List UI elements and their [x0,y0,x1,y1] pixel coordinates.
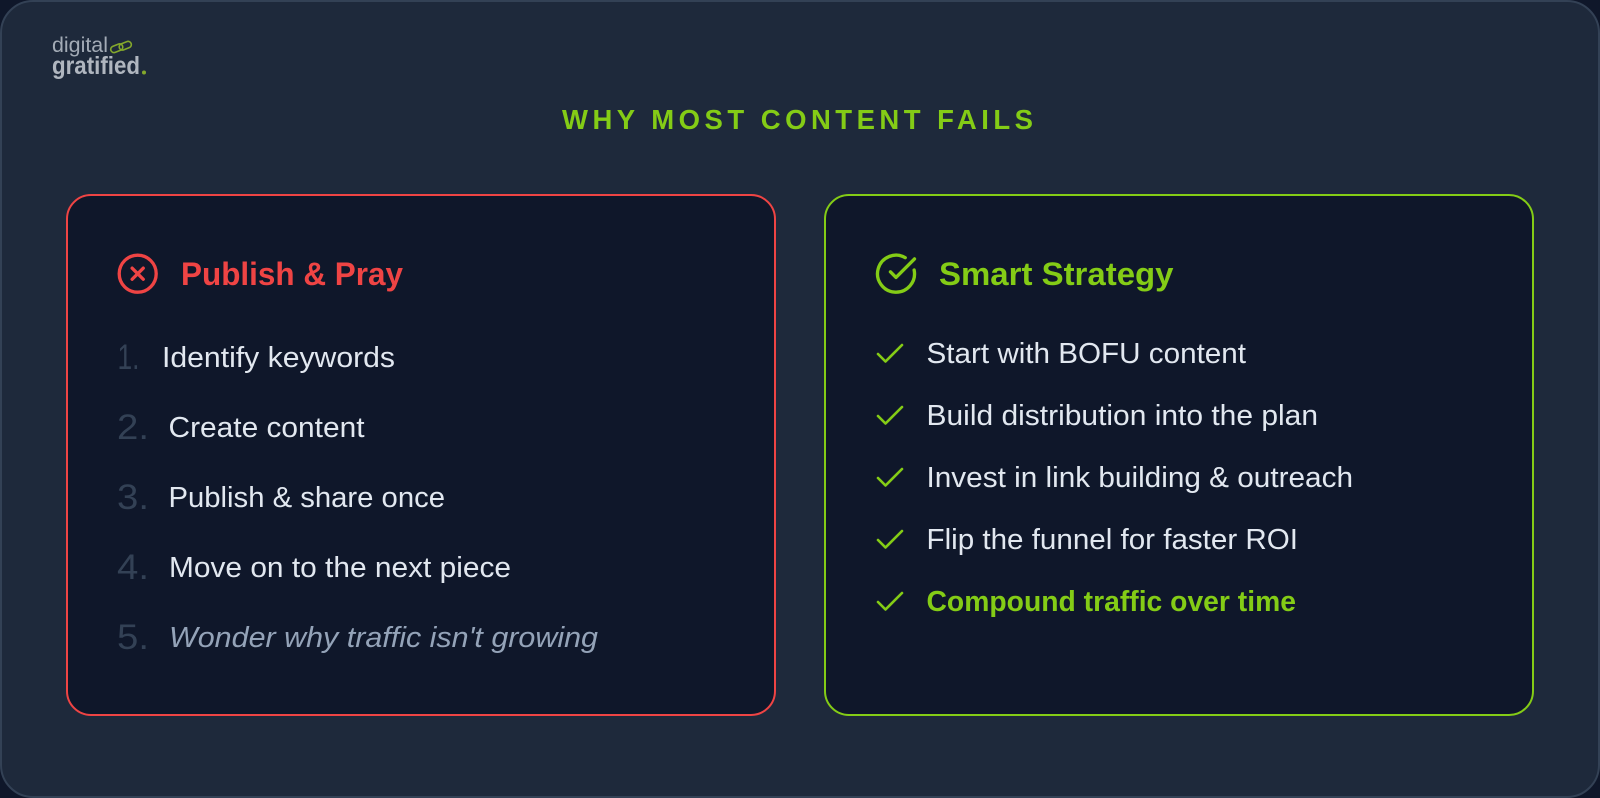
heading: publish and pray: Publish & Pray [181,256,403,292]
logo: digital gratified: gratified [52,52,140,80]
icon: check in circle [878,255,915,292]
list item 4: Move on to the next piece [169,552,511,584]
list item: start with bofu: Start with BOFU content [926,338,1246,370]
logo: digital gratified [52,33,146,80]
list item 5: Wonder why traffic isn't growing [169,622,598,654]
list item 1: Identify keywords [162,342,395,374]
list item 1: 1. [118,338,140,377]
panel: publish and pray [67,195,775,715]
list item: flip the funnel: Flip the funnel for faster ROI [926,524,1298,556]
list item 3 [117,478,445,517]
list item 2 [117,408,364,447]
list item 4: 4. [117,548,149,587]
list item: compound traffic: Compound traffic over time [926,586,1296,618]
list item 3: Publish & share once [168,482,445,514]
list item 2: 2. [117,408,149,447]
list item 5: 5. [117,618,149,657]
list item 2: Create content [168,412,364,444]
heading: smart strategy: Smart Strategy [939,256,1174,292]
list item 5 [117,618,598,657]
icon: chain link [110,40,132,54]
panel: smart strategy [825,195,1533,715]
list item 3: 3. [117,478,149,517]
list item: link building: Invest in link building & outreach [926,462,1353,494]
title: WHY MOST CONTENT FAILS [562,104,1033,135]
logo: digital gratified: digital [52,33,108,57]
list item: build distribution: Build distribution into the plan [926,400,1318,432]
list item 4 [117,548,511,587]
list item 1 [118,338,395,377]
icon: x in circle [119,255,156,292]
